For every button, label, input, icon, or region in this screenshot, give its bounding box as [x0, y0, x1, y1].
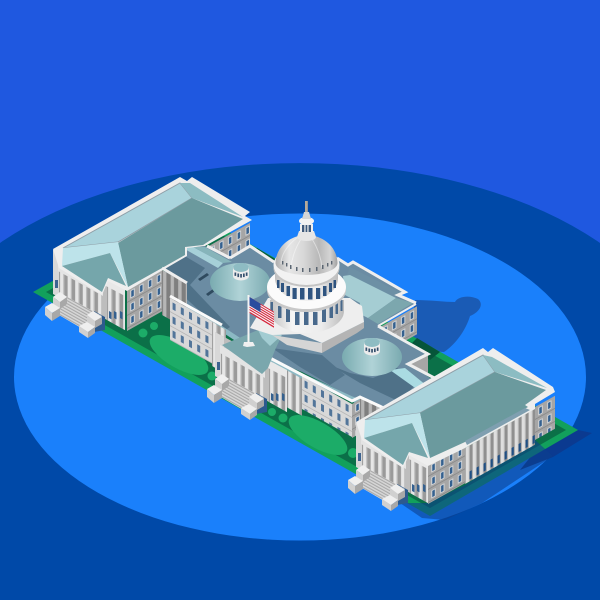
green ground plot	[33, 207, 578, 516]
ground corner shadow	[520, 430, 592, 470]
central portico roof	[222, 330, 282, 374]
bright blue ellipse	[14, 214, 586, 540]
small left lantern	[233, 263, 249, 280]
building shadow on ground	[400, 440, 553, 520]
capitol dome	[267, 201, 346, 333]
small right lantern	[364, 338, 380, 356]
small right dome	[342, 338, 402, 376]
flag and pole	[243, 295, 274, 347]
small left dome	[210, 263, 270, 301]
central roof	[162, 246, 440, 410]
right wing portico and steps	[348, 423, 428, 511]
dark blue backdrop ellipse	[0, 163, 600, 600]
left wing roof	[53, 177, 252, 295]
central left block wall	[170, 296, 226, 374]
lawn: right oval and shrubs	[268, 407, 358, 463]
right wing roof	[356, 348, 555, 468]
right wing side walls	[428, 396, 555, 504]
central right block wall	[270, 358, 390, 452]
left wing portico and steps	[45, 250, 125, 338]
rear annex walls	[207, 223, 428, 378]
left wing: rear colonnade and side wall	[127, 270, 187, 331]
dome cast shadow	[410, 297, 481, 352]
lawn: left oval and shrubs	[138, 322, 216, 383]
rotunda platform	[250, 298, 364, 353]
central portico and steps	[207, 332, 287, 420]
